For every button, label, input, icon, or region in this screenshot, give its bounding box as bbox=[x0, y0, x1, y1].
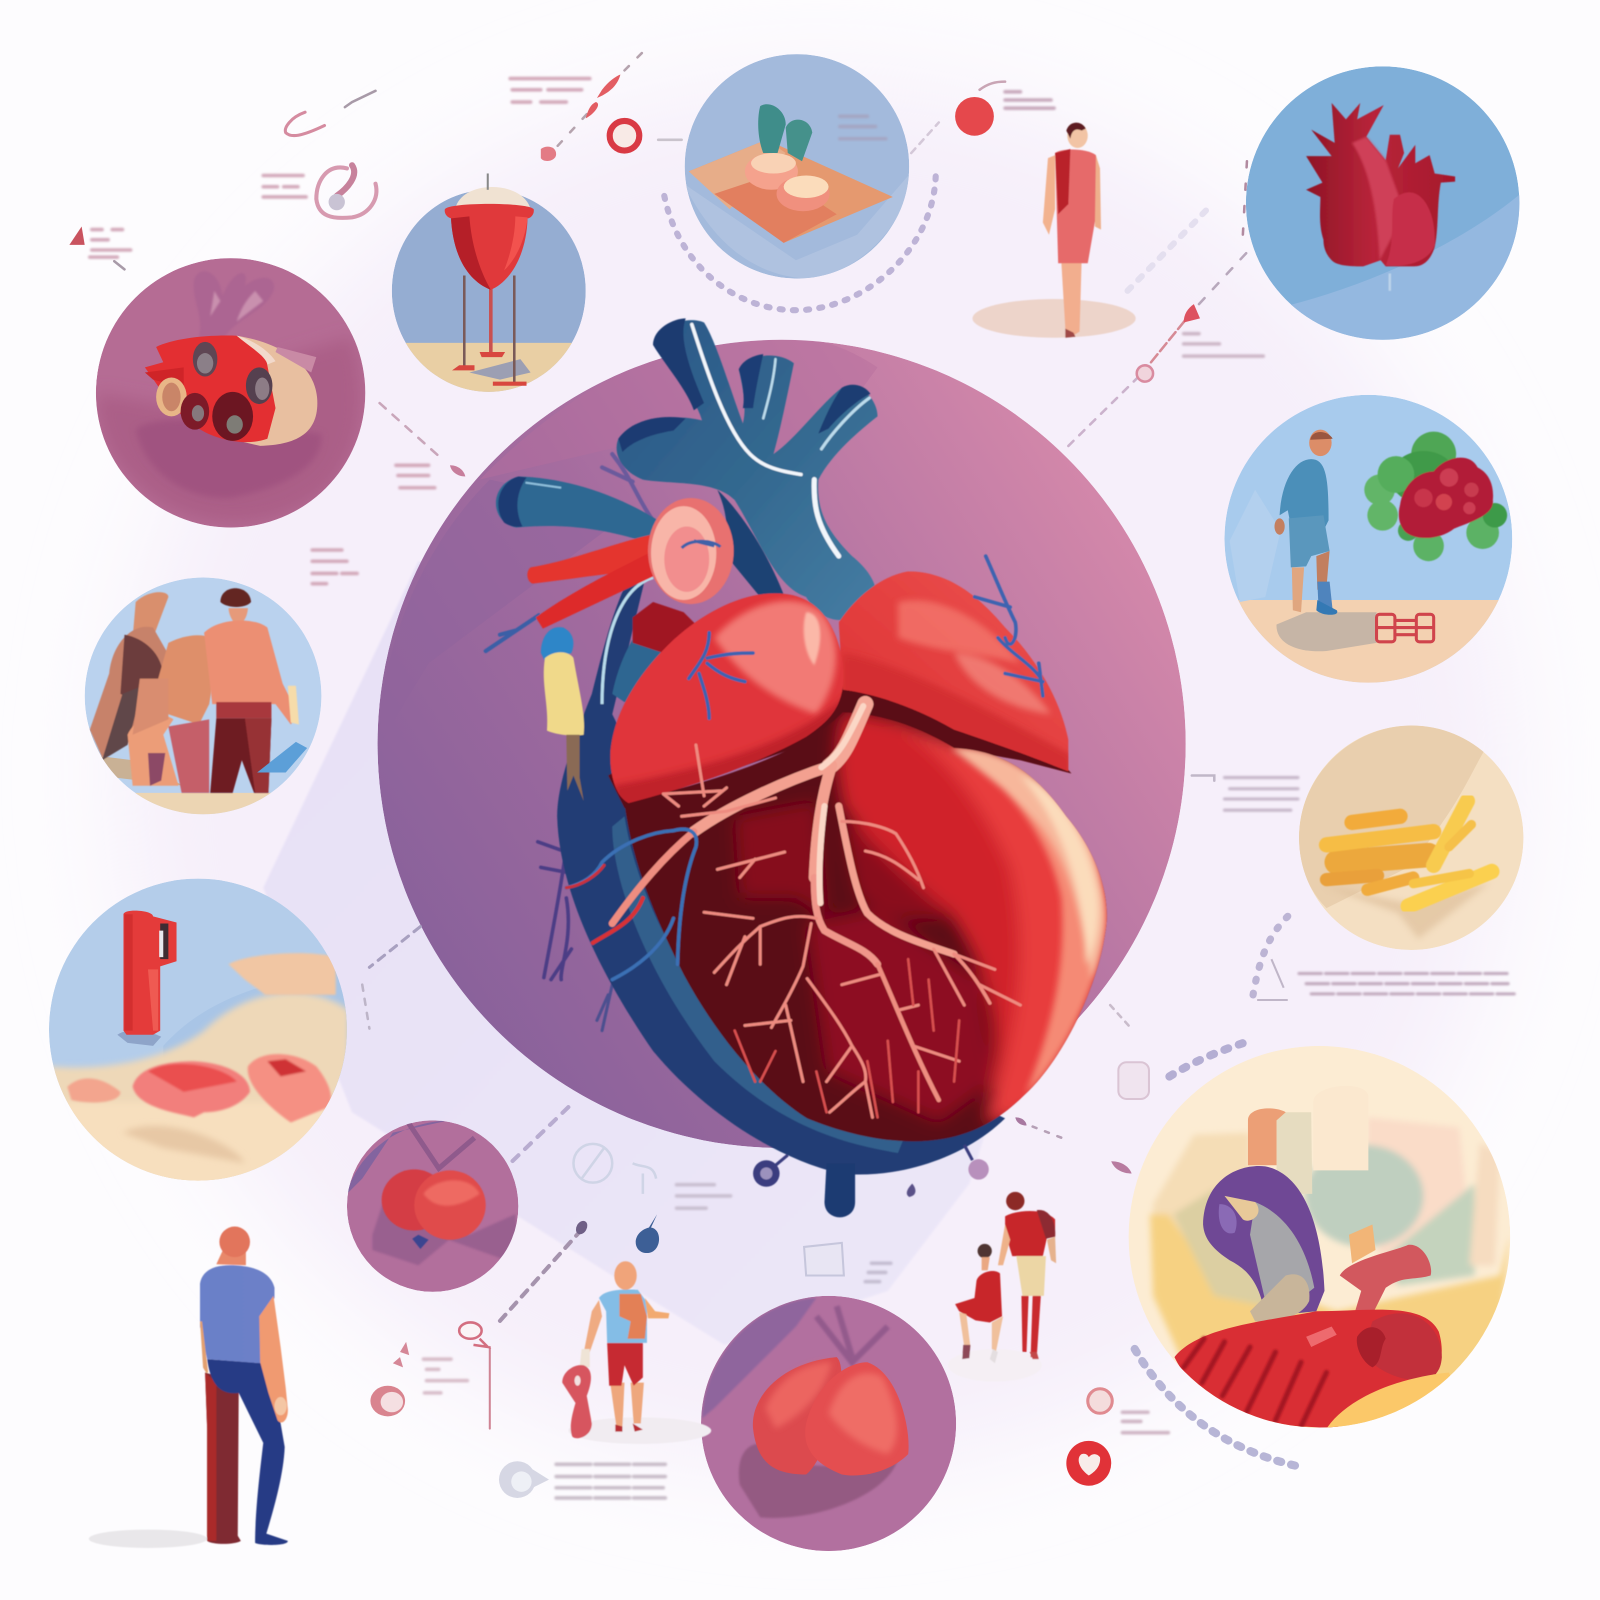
yellow dress figure bbox=[541, 627, 584, 801]
man bbox=[204, 588, 299, 793]
panel: small red lobes on mauve bbox=[347, 1120, 520, 1292]
icon: small triangles bbox=[393, 1342, 409, 1367]
icon: pink shell bbox=[370, 1386, 405, 1416]
pulmonary vessel bbox=[496, 477, 658, 546]
panel: radishes on cutting board bbox=[684, 54, 910, 279]
icon: pink swirl bbox=[316, 165, 376, 218]
ghost plant bbox=[194, 271, 274, 337]
panel: beach couple bbox=[82, 578, 327, 823]
red dumbbell icon bbox=[1377, 614, 1434, 642]
panel: golden fries bbox=[1299, 726, 1523, 950]
icon: mauve leaf bbox=[1111, 1161, 1132, 1173]
meat pieces bbox=[67, 1054, 331, 1122]
woman bbox=[90, 592, 219, 793]
panel: red cup on stand bbox=[392, 192, 586, 392]
icon: leaf marker bbox=[450, 465, 465, 477]
icon: red ring bbox=[610, 121, 639, 151]
icon: pink ring marker bbox=[1137, 365, 1153, 382]
ventricle bbox=[612, 704, 1122, 1153]
panel: vessel cross-section on mauve circle bbox=[96, 258, 365, 528]
icon: small red triangle marker bbox=[69, 227, 85, 245]
heart illustration bbox=[486, 318, 1122, 1217]
aorta branches bbox=[617, 318, 878, 620]
icon: spoon mauve bbox=[574, 1219, 590, 1236]
red bird form bbox=[1340, 1224, 1431, 1316]
red anatomical heart bbox=[1306, 103, 1455, 291]
dotted connector arcs bbox=[664, 166, 1303, 1467]
lobes bbox=[753, 1357, 909, 1476]
walker bbox=[1274, 430, 1337, 615]
dark seam behind atria bbox=[608, 673, 1071, 808]
figure: man with red paddle bbox=[562, 1261, 711, 1444]
icon: pale sphere outline bbox=[573, 1144, 656, 1194]
icon: red heart badge bbox=[1066, 1441, 1111, 1486]
left tangled veins bbox=[486, 454, 653, 1031]
panel: central purple circle bbox=[378, 337, 1186, 1148]
icon: red dot bbox=[955, 97, 994, 136]
icon: pink loop bbox=[459, 1322, 488, 1347]
icon: small pink blob bbox=[541, 147, 556, 161]
berries bbox=[1364, 432, 1507, 561]
vessel body bbox=[230, 336, 317, 446]
icon: pink crescent bbox=[285, 112, 324, 136]
dashed leader lines bbox=[114, 53, 1251, 1429]
icon: pale box bbox=[804, 1243, 844, 1276]
icon: navy drop bbox=[636, 1214, 659, 1253]
panel: large red lobes on mauve bbox=[701, 1296, 956, 1551]
figure: person in pink dress bbox=[972, 123, 1136, 338]
red artery stubs bbox=[527, 531, 704, 653]
icon: pale bag outline bbox=[1118, 1062, 1149, 1099]
icon: red droplet marker bbox=[1184, 304, 1200, 322]
small icons bbox=[69, 74, 1288, 1498]
icon: triangle outline bbox=[1257, 959, 1288, 1000]
panel: anatomical heart on blue bbox=[1246, 66, 1520, 347]
lower left vessels bbox=[566, 829, 696, 980]
navy inner vein with highlight bbox=[602, 578, 653, 704]
figure: man viewed from behind bbox=[89, 1227, 288, 1548]
red cup icon bbox=[445, 173, 534, 386]
coronary arteries bbox=[612, 704, 1020, 1117]
atrial blue veins bbox=[689, 556, 1043, 718]
bottom connector knobs bbox=[753, 1145, 989, 1217]
panel: dreamy landscape with purple figure bbox=[1129, 1046, 1510, 1449]
panel: walking man with berries bbox=[1219, 395, 1526, 692]
panel: red flask with meat on sand bbox=[49, 879, 349, 1194]
icon: pink leaf markers bbox=[586, 74, 620, 118]
navy back shell bbox=[557, 546, 1005, 1175]
red striped blanket bbox=[1174, 1310, 1442, 1429]
figure: two men in red bbox=[948, 1192, 1056, 1382]
purple figure bbox=[1203, 1166, 1324, 1322]
placeholder caption bars bbox=[90, 79, 1514, 1498]
icon: small mauve leaf bbox=[1015, 1117, 1027, 1126]
flask bbox=[117, 911, 177, 1046]
icon: pink ring badge bbox=[1088, 1389, 1112, 1413]
pink vessel opening bbox=[648, 498, 734, 604]
icon: pale orb bbox=[499, 1461, 549, 1498]
right atrium bbox=[838, 570, 1070, 772]
left atrium bbox=[610, 592, 844, 804]
